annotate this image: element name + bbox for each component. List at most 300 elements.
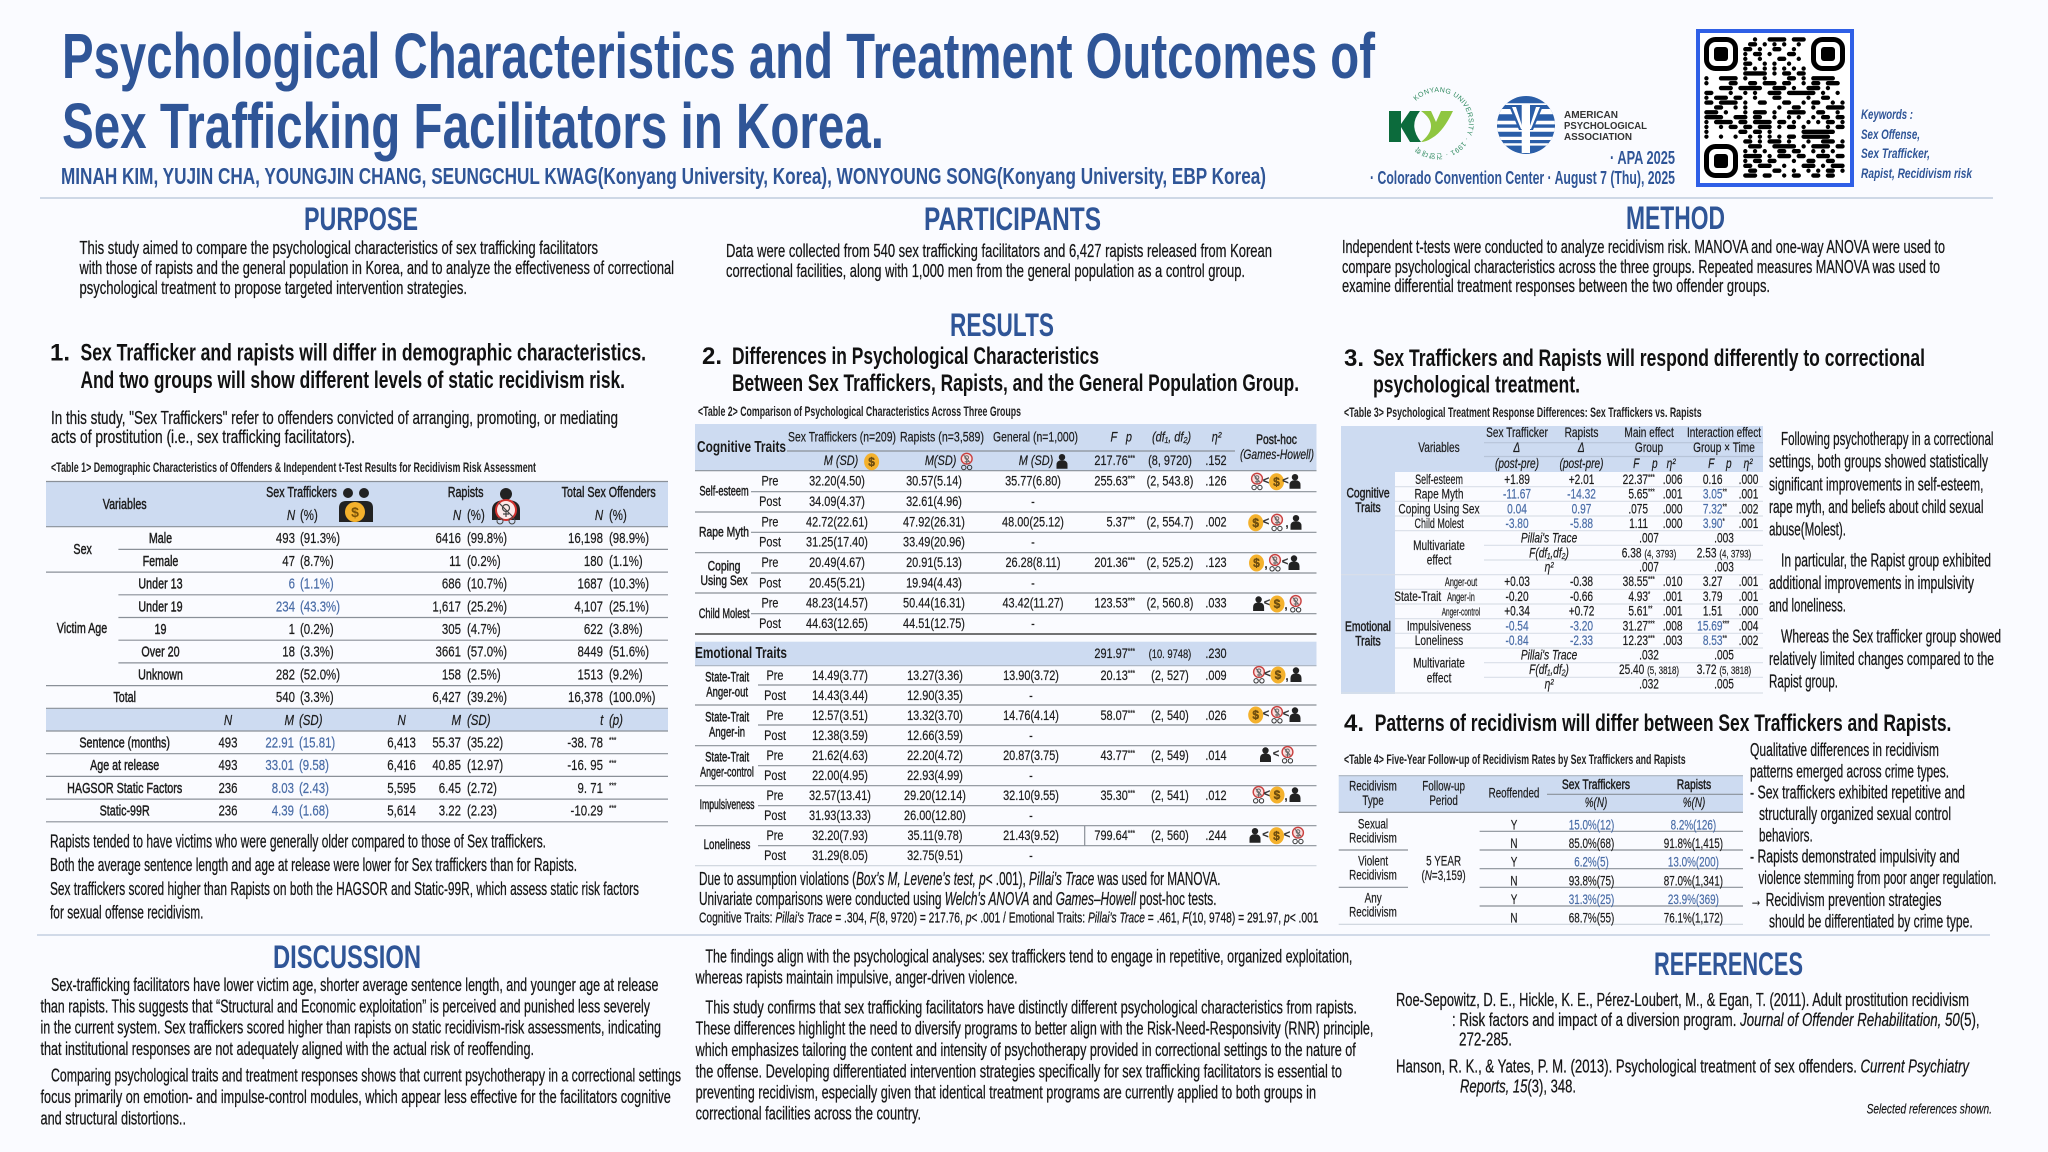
heading: references: REFERENCES [1654, 946, 1803, 982]
table 3 cognitive multivariate: η² [1545, 559, 1554, 575]
heading: participants: PARTICIPANTS [924, 201, 1101, 237]
table 4 rows: 93.8%(75) [1569, 873, 1614, 889]
table 1 header: (%) [609, 507, 627, 523]
table 2 emotional post-hoc icons [1248, 666, 1303, 844]
table 4 rows: Recidivism [1349, 830, 1397, 846]
table 3 cognitive rows: *** [1648, 489, 1655, 497]
heading: result 2: Between Sex Traffickers, Rapists, and the General Population Group. [732, 370, 1299, 397]
table 2 header: *** [1128, 454, 1135, 463]
table 2 cognitive rows: *** [1128, 556, 1135, 565]
table 2 cognitive post-hoc icons: < [1263, 516, 1269, 528]
table 1 demographic rows: (39.2%) [467, 689, 507, 705]
text: result 1 summary: Sex traffickers scored higher than Rapists on both the HAGSOR and Static-99R, which assess static risk factors [50, 879, 639, 899]
table 2 emotional post-hoc icons: , [1284, 791, 1288, 803]
table 1 demographic rows: 4,107 [574, 598, 603, 615]
table 1 demographic rows: 8449 [578, 643, 603, 660]
text: result 3 commentary: Rapist group. [1769, 672, 1838, 692]
table 3 emotional rows: 31.27 [1623, 618, 1648, 634]
table 2 emotional header [695, 645, 1227, 662]
table 2 emotional rows: 31.93(13.33) [809, 808, 871, 823]
text: result 4 commentary: → Recidivism prevention strategies [1750, 890, 1942, 910]
table 3 header: Group × Time [1693, 439, 1755, 455]
table 2 emotional rows: 31.29(8.05) [812, 848, 868, 863]
table 1 risk rows: -38. 78 [567, 734, 603, 751]
text: reference list [1396, 990, 1980, 1097]
table 3 emotional rows: Anger-in [1447, 591, 1475, 605]
table 3 cognitive rows: .001 [1663, 486, 1683, 502]
table 3 emotional rows: Anger-out [1445, 576, 1477, 590]
table 2 header: M(SD) [925, 453, 956, 468]
table 2 cognitive rows: .123 [1205, 555, 1227, 570]
table 3 cognitive rows: -3.80 [1505, 515, 1529, 531]
heading: result 1 [50, 340, 646, 394]
table 2 emotional rows: 29.20(12.14) [904, 788, 966, 803]
conference info [1370, 148, 1675, 188]
table 2 cognitive rows: 123.53 [1094, 595, 1128, 611]
table 2 cognitive post-hoc icons: , [1264, 559, 1268, 571]
table 3 emotional rows: *** [1723, 621, 1729, 629]
text: result 4 commentary: behaviors. [1759, 825, 1813, 845]
table 4 rows: Violent [1358, 853, 1389, 869]
table 1 demographic rows: 282 [276, 666, 295, 683]
table 1 risk rows: 493 [218, 757, 238, 774]
table 2 cognitive rows: 34.09(4.37) [809, 494, 865, 509]
table 3 header: p [1651, 455, 1658, 471]
table 1 risk rows: 55.37 [432, 734, 461, 751]
table 1 risk rows: (12.97) [467, 757, 503, 774]
table 2 emotional rows: .009 [1205, 668, 1227, 683]
logo: American Psychological Association: ASSOCIATION [1564, 131, 1632, 143]
table 3 cognitive rows: ** [1723, 489, 1727, 497]
table 3 emotional multivariate: effect [1427, 670, 1452, 686]
table 3 emotional rows: -0.66 [1570, 588, 1593, 604]
table 3 emotional rows: 8.53 [1703, 632, 1723, 648]
text: method body [1342, 237, 1945, 296]
text: result 4 commentary: patterns emerged across crime types. [1750, 761, 1949, 781]
table 3 emotional rows: 4.93 [1628, 588, 1648, 604]
table 1 risk rows: 9. 71 [578, 780, 603, 796]
QR code [1698, 31, 1852, 185]
table 2 cognitive rows: 201.36 [1094, 555, 1128, 570]
table 2 header: M (SD) [1019, 453, 1053, 468]
table 2 emotional rows: - [1029, 808, 1033, 823]
table 2 emotional rows: 26.00(12.80) [904, 808, 966, 823]
table 2 emotional rows: State-Trait [705, 709, 750, 725]
table 3 header: η² [1744, 455, 1753, 471]
logo: American Psychological Association: AMERICAN [1564, 109, 1618, 121]
table 3 emotional rows: Impulsiveness [1407, 618, 1471, 634]
title [62, 20, 1376, 162]
table 1 risk sub-header: M [284, 712, 294, 728]
heading: discussion: DISCUSSION [273, 939, 421, 975]
keywords: Sex Offense, [1861, 126, 1920, 142]
table 2 emotional rows: Pre [767, 828, 784, 843]
table 2 cognitive rows: 255.63 [1094, 473, 1128, 489]
table 2 header: $ [868, 455, 875, 469]
header band [61, 20, 1973, 189]
table 1 demographic rows: 1,617 [432, 598, 461, 615]
table 2 emotional rows: .244 [1205, 828, 1227, 843]
table 2 emotional rows: 32.20(7.93) [812, 828, 868, 843]
heading: result 2 [702, 343, 1299, 397]
table 1 header: (%) [467, 507, 485, 523]
table 2 header [697, 429, 1314, 470]
table 1 risk rows: 493 [218, 734, 238, 751]
table 1 header: N [453, 507, 462, 523]
table 3 cognitive rows: 3.90 [1703, 515, 1723, 531]
table 1 demographic rows: (43.3%) [300, 598, 340, 615]
table 2 emotional rows: 14.49(3.77) [812, 668, 868, 683]
table 2 emotional rows: *** [1128, 669, 1135, 678]
text: discussion left column: than rapists. This suggests that “Structural and Economic exploitation” is perceived and punished less severely [40, 996, 650, 1016]
table 3 cognitive rows: 22.37 [1623, 471, 1648, 487]
table 2 emotional rows: 58.07 [1100, 708, 1128, 723]
table 2 header: (Games-Howell) [1240, 446, 1314, 462]
table 4 rows: Sexual [1358, 816, 1388, 832]
table 3 emotional rows: .008 [1663, 618, 1683, 634]
table 2 cognitive post-hoc icons: $ [1253, 556, 1260, 570]
table 2 cognitive post-hoc icons [1248, 473, 1302, 612]
table 3 cognitive rows: *** [1648, 474, 1655, 482]
table 3 emotional rows: 3.79 [1703, 588, 1723, 604]
table 3 header: Main effect [1624, 424, 1674, 440]
table 3 emotional multivariate [1413, 647, 1751, 692]
table 1 risk rows: (35.22) [467, 734, 503, 751]
table 2 emotional post-hoc icons: < [1283, 708, 1289, 720]
table 2 cognitive rows: *** [1128, 475, 1135, 484]
table 1 risk rows: 8.03 [272, 780, 294, 796]
table 2 header: 217.76 [1094, 453, 1128, 468]
keywords [1861, 106, 1973, 181]
logo: American Psychological Association [1497, 96, 1648, 154]
table 2 cognitive rows: Pre [762, 555, 779, 570]
authors: MINAH KIM, YUJIN CHA, YOUNGJIN CHANG, SEUNGCHUL KWAG(Konyang University, Korea), WONYOUNG SONG(Konyang University, EBP Korea) [61, 163, 1266, 189]
table 1 demographic rows: (1.1%) [300, 575, 334, 592]
table 3 cognitive rows: +2.01 [1569, 471, 1595, 487]
table 3 header: Δ [1577, 439, 1585, 455]
table 2 cognitive post-hoc icons: , [1284, 600, 1288, 612]
table 3 header: Variables [1418, 439, 1460, 455]
table 3 emotional rows: .002 [1739, 632, 1759, 648]
heading: method: METHOD [1626, 200, 1725, 236]
heading: purpose: PURPOSE [304, 201, 418, 237]
table 3 cognitive rows: 7.32 [1703, 501, 1723, 517]
table 1 risk rows: 22.91 [265, 734, 294, 751]
table 3 emotional rows: -0.38 [1570, 573, 1593, 589]
title: Sex Trafficking Facilitators in Korea. [62, 90, 884, 162]
table 3 cognitive multivariate: .007 [1639, 530, 1659, 546]
heading: result 4: 4. [1344, 710, 1364, 737]
table 3 cognitive rows: Rape Myth [1414, 486, 1464, 502]
table 1 demographic rows: (91.3%) [300, 530, 340, 546]
text: result 1 summary [50, 832, 639, 922]
table 3 emotional rows [1394, 573, 1759, 648]
table 1 risk rows: 3.22 [439, 802, 461, 819]
table 1 demographic rows: 1 [289, 621, 295, 637]
table 2 emotional rows: *** [1128, 789, 1135, 798]
table 1 demographic rows: 158 [442, 666, 461, 683]
table 2 cognitive rows: .002 [1205, 514, 1227, 530]
table 1 demographic rows: (2.5%) [467, 666, 501, 683]
table 3 emotional multivariate: η² [1545, 676, 1554, 692]
table 2 cognitive rows [699, 473, 1227, 631]
table 1 risk rows: Static-99R [100, 802, 150, 819]
table 1 header: Sex Traffickers [266, 483, 337, 500]
table 1 header: Variables [103, 495, 147, 512]
table 3 emotional rows: *** [1648, 635, 1655, 643]
table 2 cognitive rows: - [1031, 616, 1035, 631]
table 1 risk sub-header: M [451, 712, 461, 728]
text: table 2 notes [699, 869, 1318, 927]
table 2 emotional rows [700, 668, 1227, 863]
table 3 emotional rows: .001 [1739, 573, 1759, 589]
table 2 emotional header: Emotional Traits [695, 645, 787, 662]
table 4 header: Reoffended [1489, 785, 1539, 801]
table 1 demographic rows: 1513 [578, 666, 603, 683]
table 2 emotional rows: 43.77 [1100, 748, 1128, 763]
table 2 cognitive rows: - [1031, 534, 1035, 550]
table 1 demographic rows: 47 [282, 553, 295, 569]
table 1 demographic rows: (52.0%) [300, 666, 340, 683]
table 2 emotional post-hoc icons: $ [1275, 668, 1282, 682]
text: reference list: Reports, 15(3), 348. [1460, 1077, 1576, 1097]
table 4 rows: 8.2%(126) [1671, 817, 1716, 833]
table 3 emotional multivariate: .005 [1714, 647, 1734, 663]
text: table 2 notes: Cognitive Traits: Pillai's Trace = .304, F(8, 9720) = 217.76, p< .001 / Emotional Traits: Pillai's Trace = .461, F(10, 9748) = 291.97, p< .001 [699, 910, 1318, 927]
table 3 cognitive multivariate: F(df₁,df₂) [1529, 545, 1569, 561]
table 4 rows: N [1510, 910, 1518, 926]
table 3 emotional rows: * [1648, 591, 1650, 599]
table 2 emotional rows: Post [764, 688, 786, 703]
table 1 demographic rows: 11 [449, 553, 461, 569]
table 3 emotional multivariate: 25.40 (5, 3818) [1619, 661, 1679, 677]
text: result 4 commentary [1750, 740, 1996, 931]
table 2 emotional rows: (2, 549) [1151, 748, 1189, 763]
table 3 cognitive rows: 1.11 [1629, 515, 1648, 531]
table 1 demographic rows: Victim Age [57, 619, 107, 636]
table 2 emotional rows: 12.66(3.59) [907, 728, 963, 743]
table 3 cognitive rows: Coping Using Sex [1398, 501, 1480, 517]
table 2 emotional rows: *** [1128, 709, 1135, 718]
table 2 cognitive rows: 50.44(16.31) [903, 595, 965, 611]
table 3 emotional multivariate: 3.72 (5, 3818) [1697, 661, 1751, 677]
text: discussion left column: and structural distortions.. [40, 1108, 186, 1128]
table 3 header: F [1633, 455, 1641, 471]
table 3 emotional rows: +0.72 [1569, 603, 1595, 619]
table 2 header: General (n=1,000) [993, 429, 1078, 445]
table 2 emotional post-hoc icons: < [1264, 788, 1270, 800]
conference info: · Colorado Convention Center · August 7 (Thu), 2025 [1370, 168, 1675, 188]
table 2 cognitive rows: Post [759, 534, 781, 550]
table 1 risk rows: HAGSOR Static Factors [67, 779, 182, 796]
table 1 risk sub-header: N [398, 712, 406, 728]
table 3 cognitive rows: 3.05 [1703, 486, 1723, 502]
table 1 risk rows: 5,614 [387, 802, 416, 819]
table 2 emotional header: (10. 9748) [1149, 648, 1191, 661]
table 4 rows: 87.0%(1,341) [1664, 873, 1723, 889]
table 3 cognitive rows: .000 [1739, 471, 1759, 487]
icon: sex traffickers with coin [339, 488, 373, 522]
table 2 cognitive post-hoc icons: < [1282, 556, 1288, 568]
table 2 header: .152 [1205, 453, 1227, 468]
table 2 cognitive rows: Self-esteem [699, 483, 749, 499]
table 1 risk sub-header [224, 712, 623, 728]
table 3 emotional rows: Loneliness [1415, 632, 1463, 648]
heading: result 3: 3. [1344, 345, 1364, 372]
table 2 emotional rows: Pre [767, 748, 784, 763]
table 2 emotional header: .230 [1205, 646, 1227, 661]
title: Psychological Characteristics and Treatment Outcomes of [62, 20, 1376, 92]
table 3 cognitive multivariate [1413, 530, 1751, 575]
table 1 risk sub-header: (SD) [299, 712, 323, 728]
text: result 1 summary: Rapists tended to have victims who were generally older compared to those of Sex traffickers. [50, 832, 546, 852]
table 4 header: Period [1429, 792, 1458, 808]
table 1 risk sub-header: (SD) [467, 712, 491, 728]
table 1 risk sub-header: t [600, 712, 605, 728]
table 2 emotional rows: Pre [767, 708, 784, 723]
table 4 rows: 85.0%(68) [1569, 835, 1614, 851]
table 2 header: (8, 9720) [1148, 453, 1192, 468]
table 3 cognitive rows: 0.97 [1572, 501, 1592, 517]
table 2 emotional rows: (2, 540) [1151, 708, 1189, 723]
table 2 cognitive rows: .126 [1205, 473, 1227, 489]
logo: American Psychological Association: PSYCHOLOGICAL [1564, 120, 1648, 132]
text: discussion middle column: which emphasizes tailoring the content and intensity of psychotherapy provided in correctional settings to the nature of [695, 1040, 1356, 1060]
table 1 risk rows: (9.58) [299, 757, 329, 774]
table 3 cognitive rows: .000 [1663, 501, 1683, 517]
table 1 risk rows: 236 [218, 802, 238, 819]
panel: result 1 [46, 340, 668, 922]
text: discussion middle column: the offense. Developing differentiated intervention strategies specifically for sex trafficking facilitators is essential to [696, 1061, 1342, 1081]
text: table 2 notes: Univariate comparisons were conducted using Welch's ANOVA and Games–Howell post-hoc tests. [699, 889, 1216, 909]
table 1 demographic rows: (57.0%) [467, 643, 507, 660]
text: purpose body: with those of rapists and the general population in Korea, and to analyze the effectiveness of correctional [79, 258, 674, 278]
table 3 cognitive rows [1398, 471, 1759, 532]
table 1 risk rows: 6,413 [387, 734, 416, 751]
table 2 cognitive rows: 42.72(22.61) [806, 514, 868, 530]
table 3 emotional rows: 3.27 [1703, 573, 1723, 589]
table 1 demographic rows: Total [113, 688, 136, 705]
table 1 demographic rows: Unknown [138, 666, 183, 683]
text: reference list: 272-285. [1459, 1029, 1512, 1049]
table 2 emotional rows: Anger-in [709, 724, 745, 740]
table 4 [1339, 776, 1743, 926]
table 3 cognitive rows: -11.67 [1503, 486, 1531, 502]
table 2 cognitive rows: 5.37 [1107, 514, 1128, 530]
table 4 rows: Y [1511, 891, 1517, 907]
table 2 header: Rapists (n=3,589) [900, 429, 984, 445]
table 4 header [1349, 776, 1711, 810]
table 2 emotional rows: 22.20(4.72) [907, 748, 963, 763]
table 2 emotional rows: .026 [1205, 708, 1227, 723]
table 2 cognitive rows: 30.57(5.14) [906, 473, 962, 489]
table 4 rows: 6.2%(5) [1574, 854, 1609, 870]
table 2 emotional rows: 21.43(9.52) [1003, 828, 1059, 843]
table 1 risk rows: *** [609, 803, 617, 813]
table 4 rows [1349, 816, 1723, 926]
panel: participants [726, 201, 1272, 281]
table 4 rows: Y [1511, 817, 1517, 833]
heading: result 1: 1. [50, 340, 70, 366]
table 2 cognitive rows: 31.25(17.40) [806, 534, 868, 550]
table 3 cognitive multivariate: Multivariate [1413, 537, 1465, 553]
table 3 emotional rows: 15.69 [1697, 618, 1723, 634]
table 2 cognitive rows: Post [759, 575, 781, 591]
table 3 cognitive multivariate: .003 [1714, 530, 1734, 546]
table 2 emotional rows: Loneliness [704, 836, 750, 852]
table 4 rows: 13.0%(200) [1668, 854, 1719, 870]
table 2 cognitive rows: - [1031, 575, 1035, 591]
text: discussion left column: Sex-trafficking facilitators have lower victim age, shorter average sentence length, and younger age at release [51, 975, 658, 995]
text: purpose body [79, 238, 674, 298]
table 3 emotional rows: +0.03 [1504, 573, 1530, 589]
text: result 3 commentary: abuse(Molest). [1769, 520, 1846, 540]
table 2 emotional rows: - [1029, 688, 1033, 703]
text: definition [51, 408, 618, 447]
table 1 risk rows: -16. 95 [567, 757, 603, 774]
table 3 emotional rows: 1.51 [1703, 603, 1723, 619]
table 1 risk rows: 40.85 [432, 757, 461, 774]
table 2 cognitive rows: (2, 525.2) [1147, 555, 1193, 570]
table 3 emotional multivariate: .032 [1639, 647, 1659, 663]
text: discussion middle column: correctional facilities across the country. [696, 1103, 921, 1123]
table 2 emotional rows: 22.93(4.99) [907, 768, 963, 783]
table 1 demographic rows: (4.7%) [467, 621, 501, 637]
text: result 3 commentary [1769, 429, 2001, 692]
table 2 emotional rows: 12.57(3.51) [812, 708, 868, 723]
table 2 cognitive post-hoc icons: < [1264, 597, 1270, 609]
table 2 cognitive rows: Pre [762, 595, 779, 611]
table 2 cognitive rows: *** [1128, 597, 1135, 606]
table 2 emotional rows: State-Trait [705, 669, 750, 685]
table 1 risk rows: (15.81) [299, 734, 335, 751]
table 2 emotional rows: Anger-out [706, 684, 749, 700]
table 1 risk rows: 33.01 [265, 757, 294, 774]
table 2 header: M (SD) [824, 453, 858, 468]
text: purpose body: psychological treatment to propose targeted intervention strategies. [80, 278, 467, 298]
table 4 rows: 15.0%(12) [1569, 817, 1614, 833]
table 2 cognitive rows: Using Sex [701, 572, 748, 588]
table 3 emotional rows: -0.54 [1505, 618, 1529, 634]
icon: sex traffickers with coin: $ [351, 504, 359, 520]
table 1 demographic rows: (51.6%) [609, 643, 649, 660]
table 2 emotional post-hoc icons: $ [1252, 708, 1259, 722]
table 3 emotional rows: .004 [1739, 618, 1759, 634]
table 2 emotional rows: (2, 560) [1151, 828, 1189, 843]
table 3 emotional multivariate: .032 [1639, 676, 1659, 692]
table 3 header: Interaction effect [1687, 424, 1761, 440]
table 2 cognitive rows: 48.00(25.12) [1002, 514, 1064, 530]
table 4 rows: N [1510, 873, 1518, 889]
table 2 emotional rows: 22.00(4.95) [812, 768, 868, 783]
table 2 emotional post-hoc icons: < [1284, 829, 1290, 841]
keywords: Rapist, Recidivism risk [1861, 165, 1973, 181]
text: discussion left column [40, 975, 681, 1128]
text: participants body [726, 241, 1272, 281]
table 2 emotional rows: 13.90(3.72) [1003, 668, 1059, 683]
table 3 header: Sex Trafficker [1486, 424, 1548, 440]
table 4 header: %(N) [1585, 794, 1607, 810]
table 4 header: Recidivism [1349, 778, 1397, 794]
table 2 caption: <Table 2> Comparison of Psychological Characteristics Across Three Groups [698, 403, 1021, 419]
table 1 demographic rows: (9.2%) [609, 666, 643, 683]
text: result 1 summary: Both the average sentence length and age at release were lower for Sex traffickers than for Rapists. [50, 855, 577, 875]
table 2 cognitive rows: 20.49(4.67) [809, 555, 865, 570]
table 1 demographic rows: (98.9%) [609, 530, 649, 546]
table 1 demographic rows [57, 529, 655, 705]
table 3 emotional rows: ** [1723, 635, 1727, 643]
table 3 cognitive rows: -5.88 [1570, 515, 1593, 531]
